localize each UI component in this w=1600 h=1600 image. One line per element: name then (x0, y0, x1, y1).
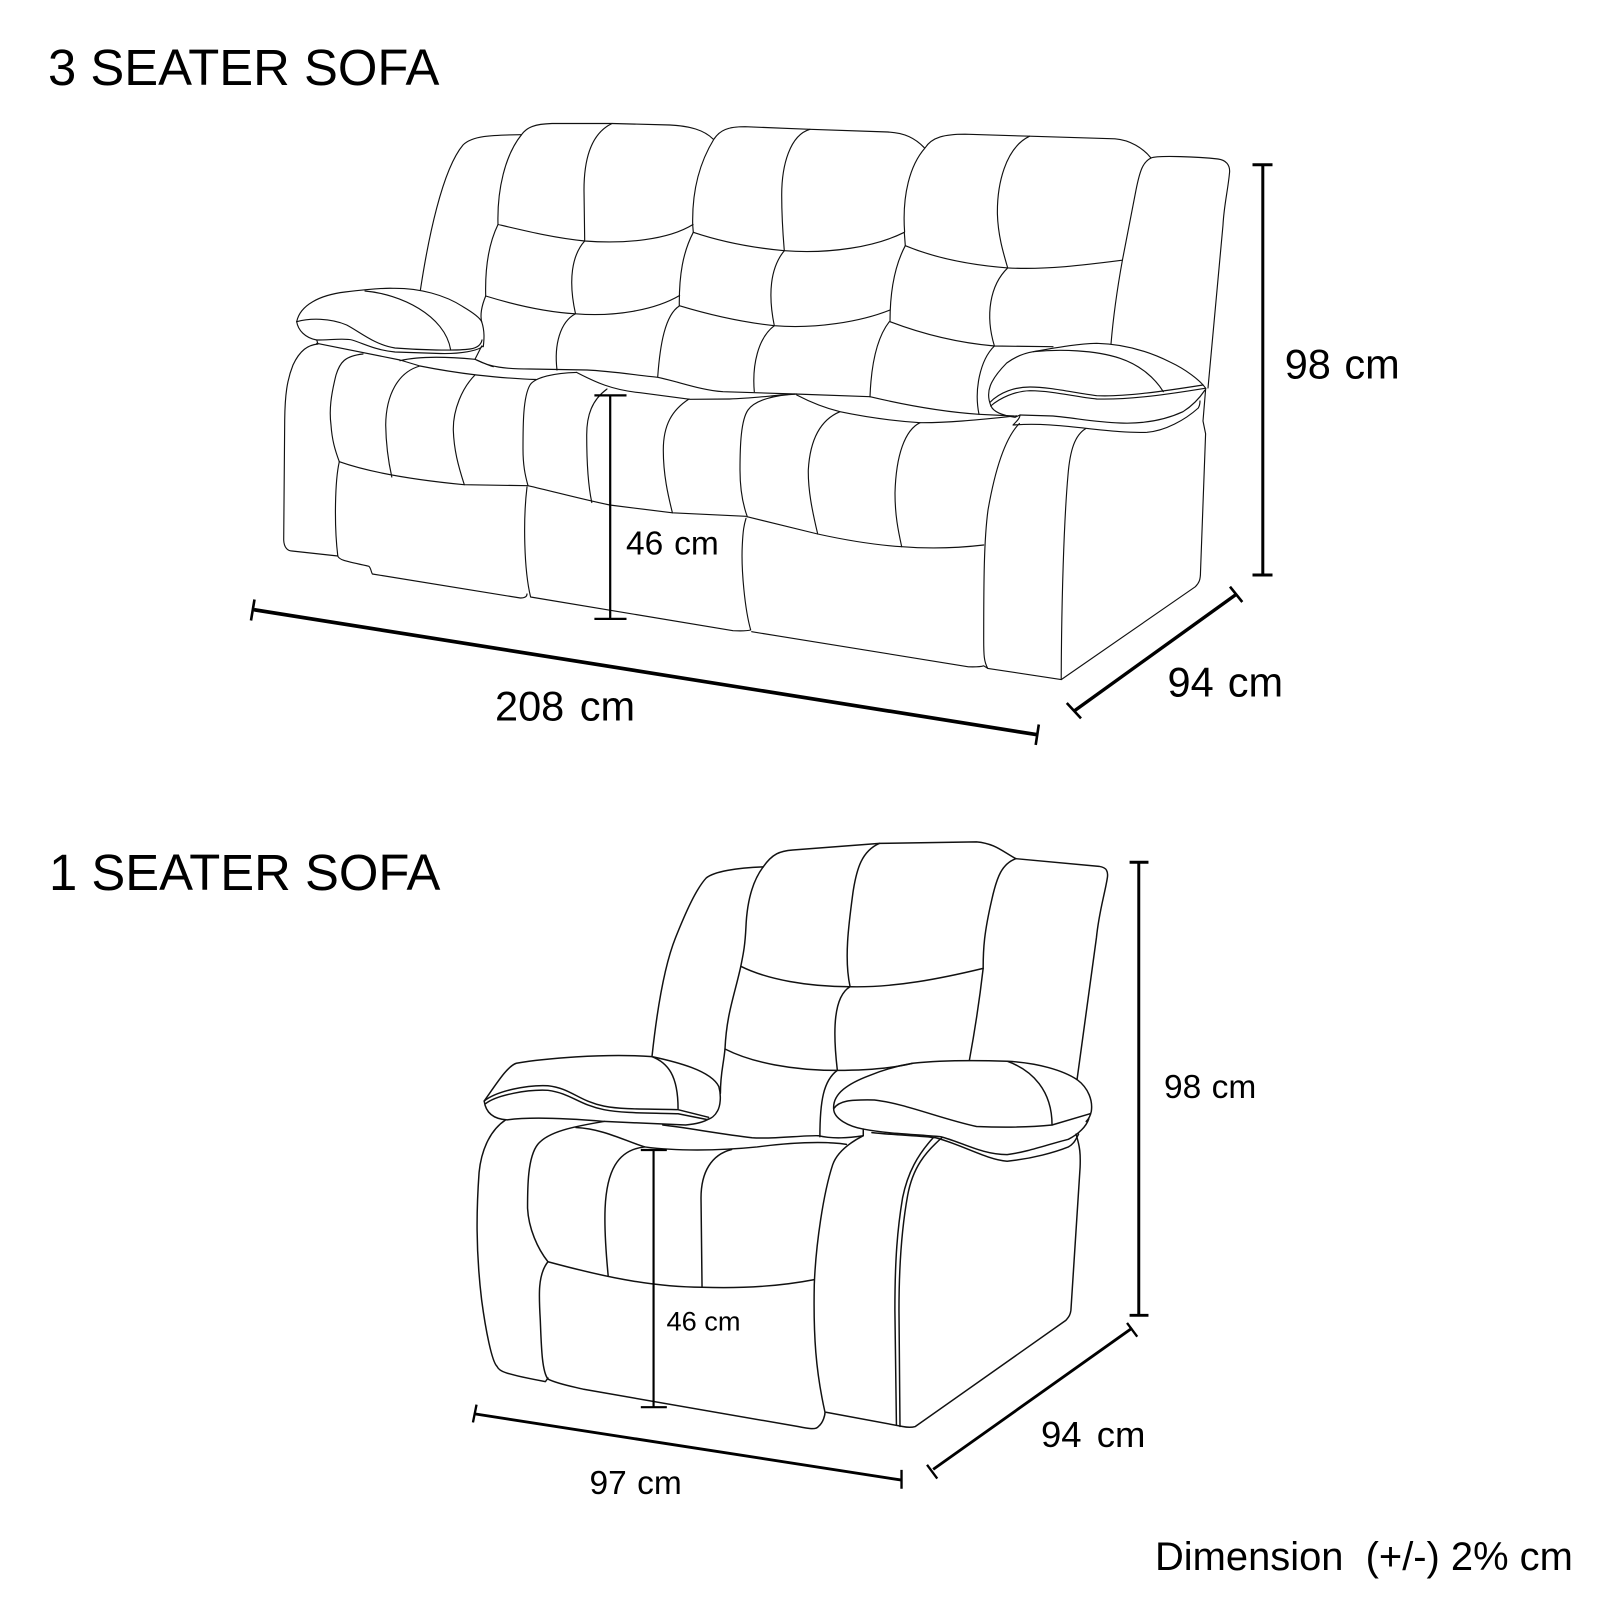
dimension line: chair seat height 46 cm (641, 1150, 667, 1407)
dimension line: chair height 98 cm (1130, 862, 1148, 1315)
label: 94 cm depth: 94 cm (1168, 658, 1283, 706)
illustration: 3 seater sofa line drawing (284, 124, 1230, 680)
label: chair 94 cm: 94 cm (1041, 1414, 1145, 1455)
label: chair 46 cm: 46 cm (666, 1306, 741, 1337)
dimension line: chair width 97 cm (473, 1405, 902, 1489)
label: chair 98 cm: 98 cm (1164, 1069, 1256, 1106)
title: 3 seater sofa: 3 SEATER SOFA (48, 39, 440, 96)
label: 98 cm height: 98 cm (1285, 341, 1400, 388)
dimension line: sofa seat height 46 cm (594, 395, 626, 619)
dimension line: sofa width 208 cm (251, 600, 1039, 745)
footnote: dimension tolerance: Dimension (+/-) 2% cm (1155, 1535, 1573, 1579)
title: 1 seater sofa: 1 SEATER SOFA (49, 844, 441, 901)
dimension line: sofa height 98 cm (1252, 165, 1272, 575)
label: 46 cm seat height: 46 cm (626, 526, 719, 563)
illustration: 1 seater sofa line drawing (477, 842, 1108, 1429)
label: 208 cm: 208 cm (495, 682, 635, 729)
label: chair 97 cm: 97 cm (590, 1465, 682, 1502)
dimension line: chair depth 94 cm (927, 1323, 1137, 1479)
dimension line: sofa depth 94 cm (1067, 587, 1242, 718)
